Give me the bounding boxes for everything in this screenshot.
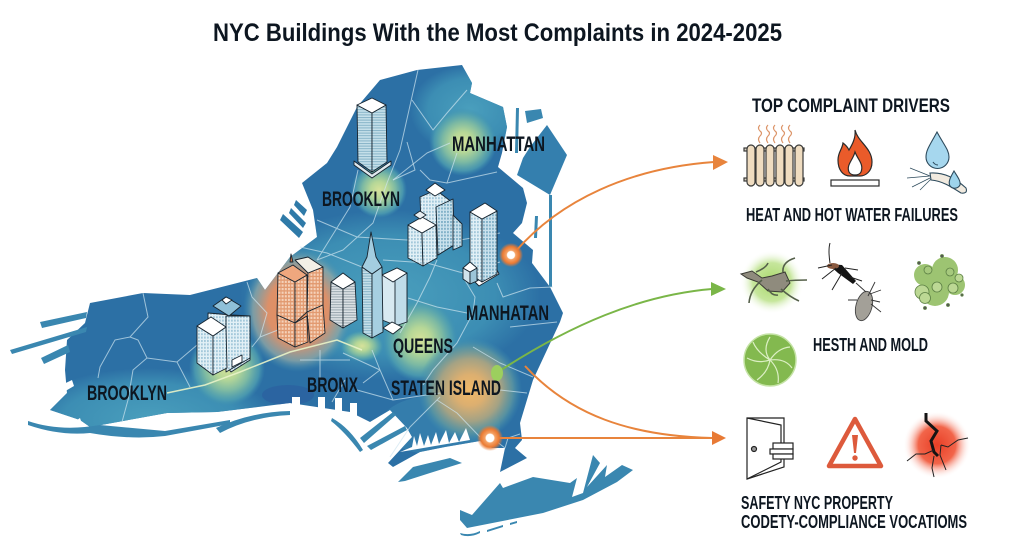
label: Manhattan east: MANHATAN: [466, 302, 549, 325]
label: pests and mold: HESTH AND MOLD: [813, 335, 928, 355]
connector: green arrow to pests and mold: [498, 282, 726, 372]
building: tall blue tower north: [354, 98, 391, 178]
panel: top complaint drivers: [744, 96, 966, 225]
icon: water drop and leaking hose: [907, 132, 966, 193]
connector: orange arrows to safety violations: [492, 366, 726, 445]
panel: safety violations: [741, 411, 971, 532]
heading: top complaint drivers: TOP COMPLAINT DRIVERS: [752, 96, 950, 117]
east lobe of the map: [517, 125, 567, 195]
hotspot marker green: [491, 365, 503, 381]
map labels: [87, 133, 549, 405]
icon: green mold disc: [744, 334, 796, 386]
harbor water cuts: [45, 380, 470, 452]
title: NYC Buildings With the Most Complaints in 2024-2025: [213, 19, 782, 47]
building: orange hot spot towers: [277, 254, 325, 347]
label: Staten Island: STATEN ISLAND: [391, 377, 501, 400]
district boundary lines: [98, 70, 557, 457]
building: downtown cluster: [408, 183, 462, 266]
label: Queens: QUEENS: [393, 335, 453, 358]
icon: gray beetle: [848, 282, 881, 323]
icon: flame: [831, 130, 879, 186]
icon: mold cluster: [914, 254, 965, 310]
icon: radiator: [744, 125, 804, 186]
label: Bronx: BRONX: [307, 374, 358, 397]
label: Manhattan north: MANHATTAN: [452, 133, 545, 156]
sliver islands and jetties: [10, 108, 633, 536]
icon: gray pest with green glow: [740, 250, 807, 314]
hotspot marker south: [477, 425, 503, 451]
label: safety violations: SAFETY NYC PROPERTY: [741, 493, 893, 513]
map landmass with heat zones: [50, 65, 563, 472]
panel: pests and mold: [740, 243, 965, 386]
icon: black insect: [818, 243, 862, 290]
building: blue office block west: [197, 297, 250, 375]
building: slim tower with annex: [463, 203, 499, 286]
label: Brooklyn north: BROOKLYN: [322, 188, 400, 211]
label: Brooklyn west: BROOKLYN: [87, 382, 167, 405]
building: gray tower: [330, 273, 357, 328]
icon: wall crack: [903, 411, 971, 479]
connector: orange arrow to heat and hot water: [515, 155, 728, 252]
icon: warning triangle: [829, 419, 881, 466]
icon: door with lock: [747, 418, 793, 479]
building: spire skyscraper: [362, 232, 407, 338]
hotspot marker east: [499, 243, 523, 267]
map of New York City: [0, 50, 633, 536]
